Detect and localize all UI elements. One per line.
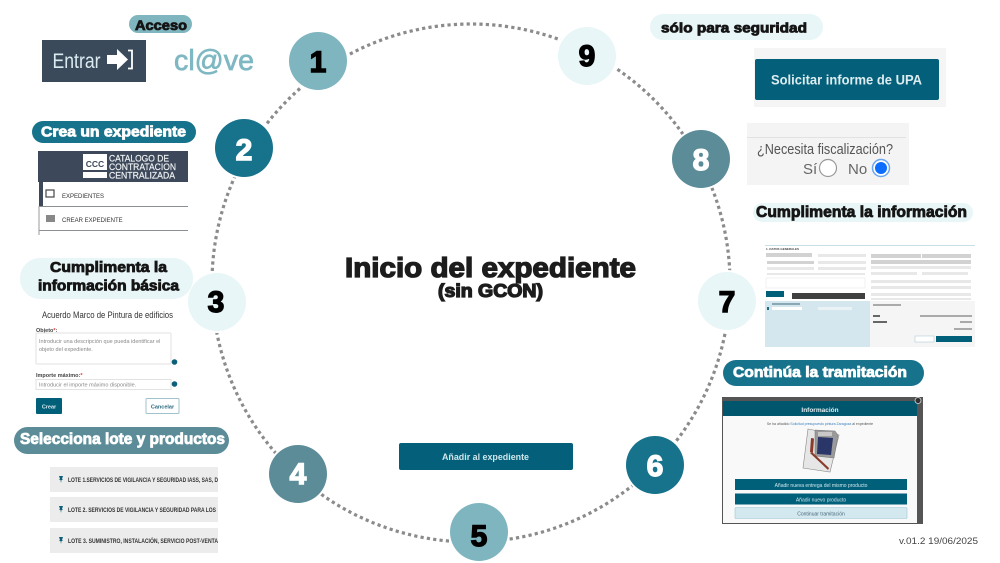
fiscalizacion question <box>747 123 909 185</box>
heading: acceso <box>129 15 192 33</box>
entrar button: Entrar <box>52 50 101 73</box>
fiscalizacion question: ¿Necesita fiscalización? <box>757 141 893 158</box>
heading: selecciona lote y productos <box>14 427 229 454</box>
button: solicitar informe de UPA: Solicitar informe de UPA <box>771 72 922 88</box>
step 7 node: 7 <box>719 286 735 319</box>
heading: continua la tramitacion <box>723 360 924 386</box>
form: Cancelar <box>151 404 175 410</box>
form screenshot: 1. DATOS GENERALES <box>766 247 799 251</box>
modal screenshot: Continuar tramitación <box>797 512 845 518</box>
heading: acceso: Acceso <box>135 18 187 33</box>
catalog banner: CATALOGO DE <box>109 154 169 164</box>
heading: continua la tramitacion: Continúa la tramitación <box>733 364 907 381</box>
button: solicitar informe de UPA <box>754 48 946 107</box>
form screenshot <box>765 245 975 347</box>
step 5 node: 5 <box>471 520 487 553</box>
step 8 node: 8 <box>693 144 709 177</box>
step 1 node: 1 <box>310 46 326 79</box>
entrar button <box>42 40 146 82</box>
form <box>36 310 179 414</box>
lote rows: LOTE 1.SERVICIOS DE VIGILANCIA Y SEGURIDAD IASS, SAS, D <box>68 478 219 484</box>
step 6 node: 6 <box>647 450 663 483</box>
heading: cumplimenta la informacion basica <box>20 258 193 299</box>
menu items: EXPEDIENTES <box>62 194 104 200</box>
catalog banner <box>38 151 188 182</box>
form: Introducir una descripción que pueda identificar el <box>39 339 160 345</box>
modal screenshot: Se ha añadido Solicitud presupuesto pintura Zaragoza al expediente <box>767 422 873 426</box>
panel: crea un expediente <box>32 121 196 235</box>
lote rows: LOTE 2. SERVICIOS DE VIGILANCIA Y SEGURIDAD PARA LOS <box>68 508 216 514</box>
step 6 node <box>624 434 686 496</box>
step 9 node: 9 <box>579 40 595 73</box>
panel: solo para seguridad <box>650 14 946 185</box>
form: Introducir el importe máximo disponible. <box>39 382 137 388</box>
step 9 node <box>556 25 618 87</box>
step 3 node: 3 <box>208 286 224 319</box>
modal screenshot: Añadir nuevo producto <box>796 498 846 504</box>
icon: enter arrow <box>107 49 128 70</box>
form: Importe máximo:* <box>36 373 83 379</box>
form: objeto del expediente. <box>39 347 93 353</box>
step 8 node <box>670 128 732 190</box>
heading: cumplimenta la informacion basica: Cumplimenta la <box>50 260 168 276</box>
step 7 node <box>696 270 758 332</box>
central subtitle: (sin GCON) <box>438 281 543 301</box>
fiscalizacion question: No <box>848 161 867 178</box>
version label: v.01.2 19/06/2025 <box>899 536 978 547</box>
clave logo: cl@ve <box>174 45 254 77</box>
step 5 node <box>448 501 510 563</box>
button: add to file <box>399 443 573 470</box>
button: add to file: Añadir al expediente <box>442 452 529 463</box>
menu items <box>38 182 188 235</box>
central title: Inicio del expediente <box>345 252 636 283</box>
panel: cumplimenta la informacion <box>753 203 975 347</box>
modal screenshot: Añadir nueva entrega del mismo producto <box>775 483 868 489</box>
heading: crea un expediente <box>32 121 196 143</box>
form: Acuerdo Marco de Pintura de edificios <box>42 310 173 320</box>
fiscalizacion question: Sí <box>803 161 818 178</box>
modal screenshot: Información <box>801 407 839 414</box>
lote rows: LOTE 3. SUMINISTRO, INSTALACIÓN, SERVICIO POST-VENTA <box>68 537 219 545</box>
step 1 node <box>287 30 349 92</box>
menu items: CREAR EXPEDIENTE <box>62 218 123 224</box>
step 4 node <box>267 443 329 505</box>
form: Crear <box>42 404 57 410</box>
heading: selecciona lote y productos: Selecciona lote y productos <box>20 431 225 448</box>
step 2 node <box>213 117 275 179</box>
panel: selecciona lote <box>14 427 229 553</box>
catalog banner: CONTRATACION <box>109 162 176 173</box>
panel: continua la tramitacion <box>722 360 924 524</box>
lote rows <box>50 467 219 553</box>
heading: solo para seguridad <box>650 14 823 40</box>
step 4 node: 4 <box>290 458 307 491</box>
form: Objeto*: <box>36 328 58 334</box>
catalog banner: CCC <box>86 159 104 169</box>
catalog banner: CENTRALIZADA <box>109 170 176 182</box>
heading: cumplimenta la informacion basica: información básica <box>38 278 180 294</box>
panel: informacion basica <box>20 258 193 414</box>
panel: acceso <box>42 15 254 82</box>
step 2 node: 2 <box>236 134 252 167</box>
heading: crea un expediente: Crea un expediente <box>41 124 186 140</box>
icon: calculator and notepad <box>803 429 839 472</box>
step 3 node <box>186 271 248 333</box>
heading: solo para seguridad: sólo para seguridad <box>661 20 807 36</box>
dotted cycle ring <box>212 24 730 542</box>
heading: cumplimenta la informacion: Cumplimenta la información <box>756 204 967 221</box>
modal screenshot <box>722 397 923 524</box>
